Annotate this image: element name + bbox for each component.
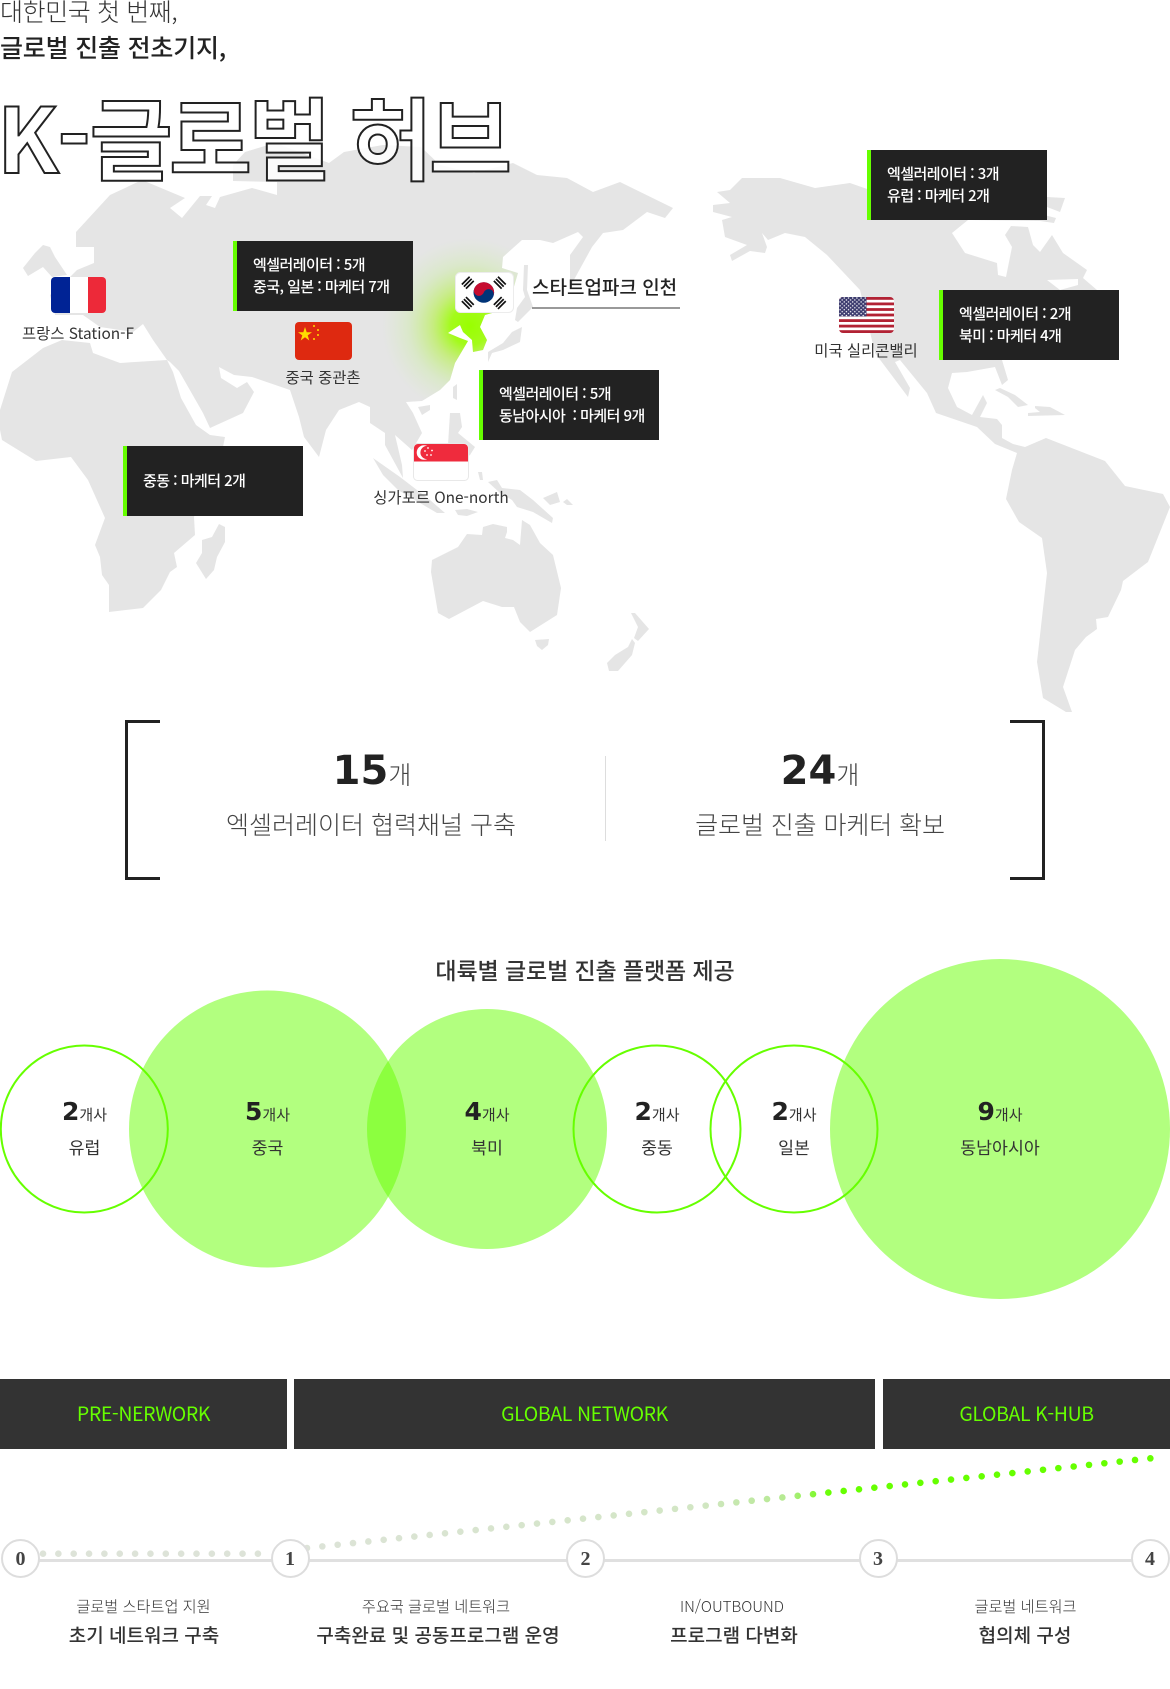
stat text: global marketers: 글로벌 진출 마케터 확보: [695, 806, 945, 842]
step text 3 main: 협의체 구성: [979, 1621, 1071, 1648]
callout: China Japan: 엑셀러레이터 : 5개: [253, 254, 365, 275]
bubble label: China: 5개사: [245, 1096, 290, 1126]
bubble label: Southeast Asia: 9개사: [977, 1096, 1022, 1126]
bubble chart: [0, 959, 1170, 1299]
callout: North America: [939, 290, 1119, 360]
bubble label: Europe: 유럽: [69, 1134, 100, 1159]
callout: Southeast Asia: 엑셀러레이터 : 5개: [499, 383, 611, 404]
icon: Singapore flag: [413, 443, 469, 481]
bubble label: North America: 4개사: [464, 1096, 510, 1126]
timeline node 1: [270, 1539, 310, 1578]
panel: stats bracket left: [125, 720, 160, 880]
callout: Europe: 유럽 : 마케터 2개: [887, 185, 989, 206]
timeline node 0: [1, 1539, 40, 1578]
step text 3 sub: 글로벌 네트워크: [974, 1595, 1077, 1617]
callout: Southeast Asia: [479, 370, 659, 440]
phase bar: global k-hub: GLOBAL K-HUB: [959, 1398, 1094, 1427]
bubble label: North America: 북미: [471, 1134, 503, 1159]
bubble label: Middle East: 중동: [641, 1134, 673, 1159]
callout: China Japan: [233, 241, 413, 311]
bubble label: Europe: 2개사: [62, 1096, 107, 1126]
label: France Station-F: 프랑스 Station-F: [22, 322, 134, 344]
bubble label: Japan: [771, 1096, 817, 1159]
timeline track and dotted rise: [40, 1455, 1154, 1562]
timeline node 2: 2: [580, 1548, 590, 1570]
phase bar: pre-network: PRE-NERWORK: [77, 1398, 210, 1427]
callout: Southeast Asia: 동남아시아 : 마케터 9개: [499, 405, 645, 426]
label: China Zhongguancun: 중국 중관촌: [285, 366, 361, 388]
bubble label: Middle East: 2개사: [634, 1096, 680, 1126]
title: K-global hub outlined: K-글로벌 허브: [0, 69, 509, 199]
label: Singapore One-north: 싱가포르 One-north: [373, 486, 509, 508]
phase bar: global network: GLOBAL NETWORK: [501, 1398, 668, 1427]
icon: China flag: [295, 322, 352, 360]
stat: 24 marketers: 24개: [781, 748, 859, 794]
timeline node 4: [1130, 1539, 1170, 1578]
callout: Middle East: [123, 446, 303, 516]
panel: stats bracket right: [1010, 720, 1045, 880]
bubble label: Southeast Asia: [960, 1096, 1040, 1159]
phase bar: global k-hub: [883, 1379, 1170, 1449]
bubble label: Europe: [62, 1096, 107, 1159]
icon: Korea flag: [455, 272, 514, 313]
timeline node 1: 1: [285, 1548, 295, 1570]
callout: Europe: 엑셀러레이터 : 3개: [887, 163, 999, 184]
label: Startup Park Incheon: 스타트업파크 인천: [532, 273, 677, 300]
phase bar: global network: [294, 1379, 875, 1449]
bubble label: Southeast Asia: 동남아시아: [960, 1134, 1040, 1159]
world map: [0, 145, 1170, 712]
bubble label: China: 중국: [252, 1134, 283, 1159]
icon: France flag: [51, 277, 106, 313]
intro line 2: 글로벌 진출 전초기지,: [0, 29, 226, 65]
step text 1 sub: 주요국 글로벌 네트워크: [362, 1595, 510, 1617]
step text 0 main: 초기 네트워크 구축: [69, 1621, 219, 1648]
step text 2 main: 프로그램 다변화: [670, 1621, 798, 1648]
icon: USA flag: [839, 297, 894, 333]
bubble label: Japan: 일본: [778, 1134, 810, 1159]
step text 2 sub: IN/OUTBOUND: [680, 1595, 784, 1617]
timeline node 3: 3: [873, 1548, 883, 1570]
bubble label: Japan: 2개사: [771, 1096, 817, 1126]
callout: North America: 북미 : 마케터 4개: [959, 325, 1061, 346]
timeline node 0: 0: [16, 1548, 26, 1570]
phase bar: pre-network: [0, 1379, 287, 1449]
step text 1 main: 구축완료 및 공동프로그램 운영: [316, 1621, 560, 1648]
timeline node 4: 4: [1145, 1548, 1155, 1570]
stat: 15 accelerators: 15개: [333, 748, 411, 794]
callout: China Japan: 중국, 일본 : 마케터 7개: [253, 276, 389, 297]
callout: North America: 엑셀러레이터 : 2개: [959, 303, 1071, 324]
label: USA Silicon Valley: 미국 실리콘밸리: [814, 339, 918, 361]
heading: continental platform: 대륙별 글로벌 진출 플랫폼 제공: [435, 952, 735, 986]
timeline node 3: [858, 1539, 898, 1578]
callout: Middle East: 중동 : 마케터 2개: [143, 470, 245, 491]
stat text: accelerator channels: 엑셀러레이터 협력채널 구축: [226, 806, 516, 842]
step text 0 sub: 글로벌 스타트업 지원: [76, 1595, 211, 1617]
bubble label: China: [245, 1096, 290, 1159]
bubble label: North America: [464, 1096, 510, 1159]
timeline node 2: [566, 1539, 605, 1578]
callout: Europe: [867, 150, 1047, 220]
bubble label: Middle East: [634, 1096, 680, 1159]
